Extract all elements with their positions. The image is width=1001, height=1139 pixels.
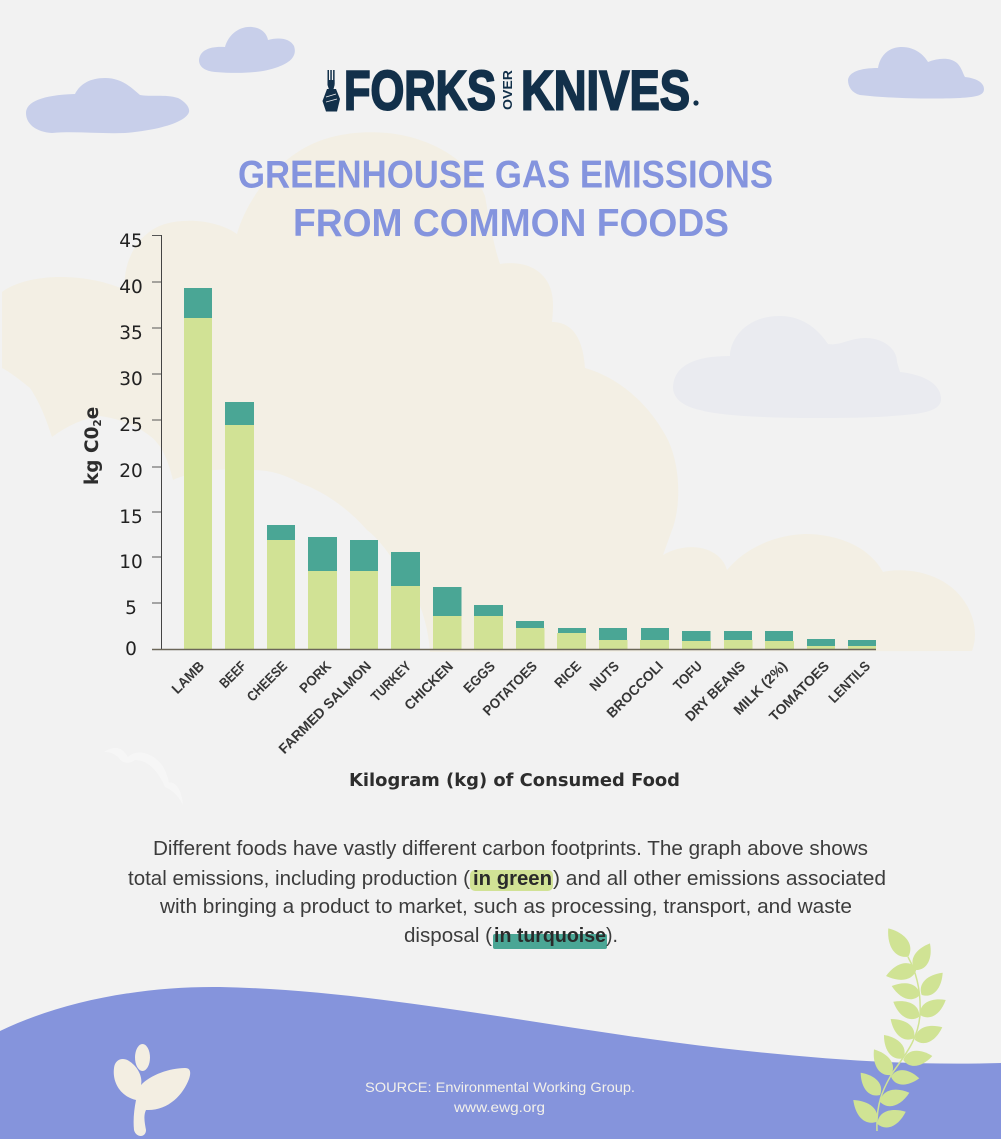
logo word: over: OVER (500, 69, 515, 110)
faint white bird (104, 748, 183, 805)
title: FROM COMMON FOODS (293, 202, 729, 245)
x axis category labels: LENTILS (825, 658, 873, 706)
x axis category labels: TOFU (670, 658, 705, 693)
x axis category labels: BEEF (216, 658, 249, 691)
y axis ticks and line (152, 235, 162, 649)
x axis category labels: POTATOES (479, 658, 540, 719)
y axis numbers: 20 (119, 461, 143, 482)
title: GREENHOUSE GAS EMISSIONS (238, 154, 773, 196)
y axis title: kg C0 (82, 427, 103, 485)
y axis numbers: 10 (119, 552, 143, 573)
source text: www.ewg.org (453, 1099, 545, 1115)
x axis category labels (168, 657, 873, 757)
x axis category labels: NUTS (586, 658, 622, 694)
x axis title: Kilogram (kg) of Consumed Food (349, 770, 680, 791)
bars: other emissions in turquoise (184, 288, 876, 646)
description text block: ). (606, 924, 618, 947)
top right cloud (848, 47, 984, 99)
y axis numbers: 45 (119, 231, 143, 252)
top left cloud (26, 78, 189, 133)
x axis category labels: RICE (551, 658, 584, 691)
bars: production in green (184, 318, 876, 649)
x axis category labels: LAMB (168, 658, 207, 697)
y axis numbers: 25 (119, 415, 143, 436)
y axis numbers: 40 (119, 277, 143, 298)
background beige cloud (2, 132, 975, 652)
y axis numbers: 5 (125, 598, 137, 619)
x axis category labels: FARMED SALMON (275, 658, 374, 757)
source text (365, 1079, 635, 1115)
y axis numbers: 0 (125, 639, 137, 660)
title (238, 154, 773, 245)
bar chart (82, 231, 876, 791)
icon: green leafy branch (848, 923, 950, 1131)
description text block: Different foods have vastly different carbon footprints. The graph above shows (153, 837, 868, 860)
x axis category labels: BROCCOLI (603, 658, 666, 721)
description text block: in green (473, 867, 552, 890)
description text block: ) and all other emissions associated (553, 867, 886, 890)
highlight: green (470, 870, 553, 891)
x axis category labels: DRY BEANS (682, 658, 748, 724)
x axis category labels: TOMATOES (766, 658, 832, 724)
source text: SOURCE: Environmental Working Group. (365, 1079, 635, 1095)
x axis category labels: CHEESE (243, 658, 290, 704)
y axis numbers: 15 (119, 507, 143, 528)
top middle cloud (199, 27, 295, 73)
logo registered mark (693, 100, 699, 106)
logo word: forks: FORKS (344, 58, 496, 122)
logo word: knives: KNIVES (521, 58, 690, 122)
description text block: with bringing a product to market, such as processing, transport, and waste (159, 895, 852, 918)
x axis category labels: TURKEY (367, 657, 415, 704)
bottom purple wave (0, 987, 1001, 1139)
description text block (128, 837, 886, 949)
y axis title: e (82, 407, 103, 419)
highlight: turquoise (493, 934, 607, 949)
description text block: total emissions, including production ( (128, 867, 470, 890)
x axis category labels: MILK (2%) (730, 658, 790, 718)
y axis numbers (119, 231, 143, 660)
description text block: disposal ( (404, 924, 492, 947)
faint grey cloud (673, 316, 941, 418)
x axis category labels: PORK (296, 658, 334, 696)
icon: fork and fist (322, 70, 340, 112)
icon: sprout (114, 1044, 190, 1136)
x axis category labels: CHICKEN (401, 658, 456, 713)
y axis numbers: 30 (119, 369, 143, 390)
description text block: in turquoise (494, 924, 606, 947)
y axis title: 2 (92, 419, 104, 427)
logo: Forks Over Knives (322, 58, 699, 122)
y axis numbers: 35 (119, 323, 143, 344)
x axis category labels: EGGS (460, 658, 498, 696)
x axis line (152, 648, 876, 650)
